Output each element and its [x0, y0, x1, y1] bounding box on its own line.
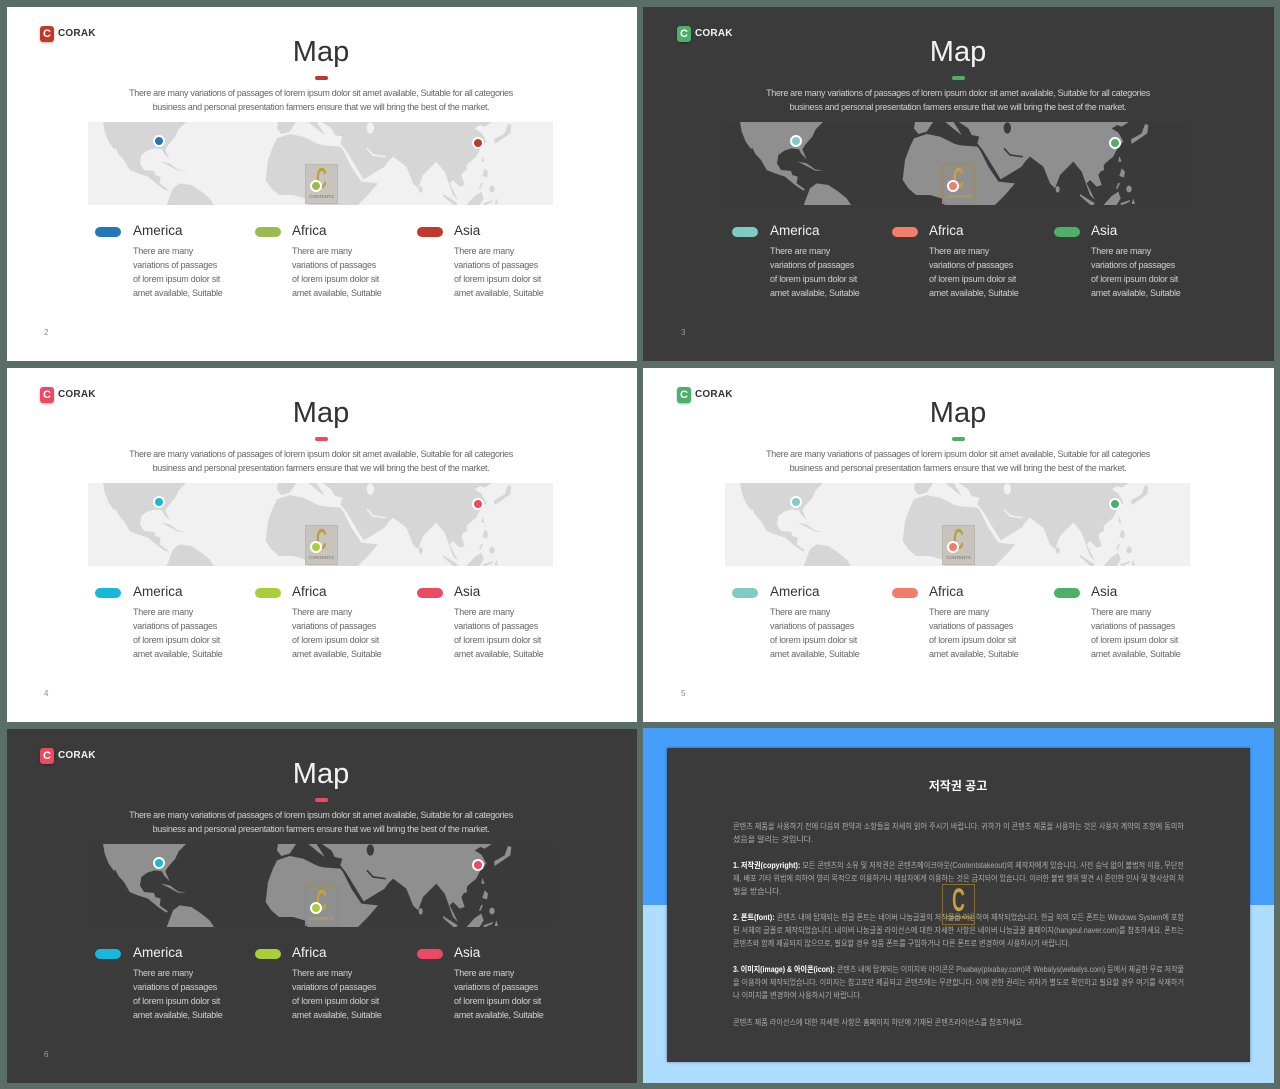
legend heading: Africa: Africa [292, 223, 327, 238]
legend heading: America: America [770, 584, 820, 599]
legend text: America: amet available, Suitable [770, 649, 860, 659]
logo icon [677, 26, 691, 42]
intro text: There are many variations of passages of lorem ipsum dolor sit amet available, Suitable for all categories [129, 449, 513, 459]
legend text: America: of lorem ipsum dolor sit [133, 996, 220, 1006]
notice text: 1. 저작권(copyright): 모든 콘텐츠의 소유 및 저작권은 콘텐츠메이크아웃(Contentstakeout)의 제작자에게 있습니다. 사전 승낙 없이 불법적 이용, 무단전 [733, 860, 1184, 870]
legend text: America: amet available, Suitable [770, 288, 860, 298]
legend pill: America [732, 588, 758, 598]
legend text: Africa: There are many [292, 246, 352, 256]
legend heading: America: America [770, 223, 820, 238]
legend text: Asia: variations of passages [454, 982, 538, 992]
watermark: CONTENTS [946, 915, 971, 920]
legend text: Africa: amet available, Suitable [929, 649, 1019, 659]
legend text: Africa: variations of passages [292, 982, 376, 992]
legend text: Africa: of lorem ipsum dolor sit [292, 996, 379, 1006]
pin: Asia [1109, 137, 1121, 149]
legend text: Africa [929, 607, 1019, 659]
legend text: America [133, 607, 223, 659]
legend text: Asia: There are many [454, 968, 514, 978]
title accent [315, 437, 328, 441]
notice text: 3. 이미지(image) & 아이콘(icon): 콘텐츠 내에 탑재되는 이미지와 아이콘은 Pixabay(pixabay.com)와 Webalys(webalys.com) 등에서 제공한 무료 저작물 [733, 964, 1184, 974]
legend text: America [770, 607, 860, 659]
watermark [305, 164, 338, 204]
notice text: 된 서체의 글꼴로 제작되었습니다. 네이버 나눔글꼴 라이선스에 대한 자세한 사항은 네이버 나눔글꼴 홈페이지(hangeul.naver.com)를 참조하세요. 폰트는 [733, 925, 1184, 935]
slide: dark map with teal, coral, green [643, 7, 1274, 361]
legend pill: Asia [1054, 227, 1080, 237]
intro text [766, 88, 1150, 112]
watermark [942, 164, 975, 204]
pin: Africa [310, 180, 322, 192]
pin: Africa [947, 541, 959, 553]
legend text: Asia: There are many [454, 607, 514, 617]
logo icon: C [43, 750, 51, 762]
intro text [129, 449, 513, 473]
intro text: There are many variations of passages of lorem ipsum dolor sit amet available, Suitable for all categories [766, 88, 1150, 98]
legend text: Asia: amet available, Suitable [1091, 288, 1181, 298]
legend text: Asia: There are many [1091, 607, 1151, 617]
intro text: There are many variations of passages of lorem ipsum dolor sit amet available, Suitable for all categories [766, 449, 1150, 459]
legend text: Africa: amet available, Suitable [292, 649, 382, 659]
legend text: Africa: There are many [292, 607, 352, 617]
slide: copyright notice [643, 728, 1274, 1083]
legend text: America: There are many [770, 607, 830, 617]
legend text: Asia: variations of passages [454, 621, 538, 631]
legend heading: Africa: Africa [292, 945, 327, 960]
legend text: Asia [1091, 607, 1181, 659]
pin: Asia [472, 498, 484, 510]
legend text: Asia: variations of passages [1091, 260, 1175, 270]
legend text: America [133, 968, 223, 1020]
legend text: Asia: of lorem ipsum dolor sit [454, 635, 541, 645]
pin: America [153, 496, 165, 508]
watermark: CONTENTS [309, 916, 334, 921]
world map [725, 483, 1190, 566]
slide: white map with teal, coral, green [643, 368, 1274, 722]
legend text: America: There are many [133, 246, 193, 256]
legend pill: Africa [255, 949, 281, 959]
logo icon [40, 387, 54, 403]
slide: dark map with cyan, lime, pink [7, 729, 637, 1083]
notice text: 을 이용하여 제작되었습니다. 이미지는 참고로만 제공되고 콘텐츠에는 무관합니다. 이에 관한 권리는 귀하가 별도로 확인하고 필요할 경우 여기를 삭제하거 [733, 977, 1184, 987]
title accent [952, 76, 965, 80]
legend text: America: variations of passages [133, 260, 217, 270]
logo icon: C [680, 28, 688, 40]
notice text: 셨음을 알리는 것입니다. [733, 834, 813, 844]
legend text: Asia: amet available, Suitable [1091, 649, 1181, 659]
intro text: business and personal presentation farmers ensure that we will bring the best of the market. [790, 102, 1126, 112]
title accent [315, 76, 328, 80]
logo wordmark: CORAK [695, 28, 733, 39]
notice text: 나 이미지를 변경하여 사용하시기 바랍니다. [733, 990, 862, 1000]
logo wordmark: CORAK [58, 389, 96, 400]
title: Map [293, 36, 349, 68]
legend heading: Asia: Asia [454, 584, 480, 599]
legend text: Asia: of lorem ipsum dolor sit [1091, 635, 1178, 645]
legend text: Asia: variations of passages [454, 260, 538, 270]
pin: Africa [310, 902, 322, 914]
legend pill: America [95, 588, 121, 598]
world map [103, 844, 512, 927]
pin: America [790, 135, 802, 147]
legend text: America: of lorem ipsum dolor sit [770, 635, 857, 645]
intro text: business and personal presentation farmers ensure that we will bring the best of the market. [153, 824, 489, 834]
page number: 2 [44, 328, 48, 337]
intro text [766, 449, 1150, 473]
legend text: Africa: amet available, Suitable [292, 288, 382, 298]
logo wordmark: CORAK [695, 389, 733, 400]
legend text: Africa: of lorem ipsum dolor sit [929, 635, 1016, 645]
legend heading: America: America [133, 945, 183, 960]
watermark [942, 525, 975, 565]
legend text: Africa [292, 968, 382, 1020]
legend text: America: variations of passages [133, 982, 217, 992]
legend text: Africa [292, 607, 382, 659]
legend heading: Africa: Africa [292, 584, 327, 599]
legend text: Asia [454, 968, 544, 1020]
legend heading: America: America [133, 584, 183, 599]
page number: 4 [44, 689, 48, 698]
notice text [733, 778, 1185, 1027]
legend heading: Asia: Asia [454, 945, 480, 960]
title: Map [930, 36, 986, 68]
title: Map [930, 397, 986, 429]
legend text: Asia: There are many [454, 246, 514, 256]
watermark [305, 525, 338, 565]
logo icon [40, 26, 54, 42]
notice text: 저작권 공고 [929, 778, 987, 793]
legend text: Asia: of lorem ipsum dolor sit [454, 274, 541, 284]
legend text: America: amet available, Suitable [133, 1010, 223, 1020]
legend text: Asia: amet available, Suitable [454, 1010, 544, 1020]
legend text: America: There are many [770, 246, 830, 256]
page number: 5 [681, 689, 685, 698]
legend pill: Asia [1054, 588, 1080, 598]
watermark: CONTENTS [309, 555, 334, 560]
page number: 6 [44, 1050, 48, 1059]
legend text: America: variations of passages [133, 621, 217, 631]
legend text: Africa: amet available, Suitable [929, 288, 1019, 298]
intro text: business and personal presentation farmers ensure that we will bring the best of the market. [153, 463, 489, 473]
legend text: America [770, 246, 860, 298]
notice text: 콘텐츠와 함께 제공되지 않으므로, 필요할 경우 정품 폰트를 구입하거나 다른 폰트로 변경하여 사용하시기 바랍니다. [733, 938, 1070, 948]
notice panel [667, 748, 1250, 1062]
logo icon: C [43, 389, 51, 401]
legend text: America: There are many [133, 968, 193, 978]
legend text: America: amet available, Suitable [133, 288, 223, 298]
notice text: 벌을 받습니다. [733, 886, 782, 896]
pin: America [153, 135, 165, 147]
legend text: Africa: There are many [929, 607, 989, 617]
watermark: CONTENTS [946, 194, 971, 199]
legend text: Africa [929, 246, 1019, 298]
legend pill: Asia [417, 588, 443, 598]
legend text: Asia [454, 607, 544, 659]
legend text: Africa: variations of passages [929, 621, 1013, 631]
legend text: Africa: variations of passages [292, 621, 376, 631]
legend pill: Africa [892, 227, 918, 237]
legend text: America: of lorem ipsum dolor sit [133, 274, 220, 284]
pin: America [790, 496, 802, 508]
watermark [942, 884, 975, 925]
legend heading: Africa: Africa [929, 223, 964, 238]
legend text: America [133, 246, 223, 298]
legend text: Africa: variations of passages [929, 260, 1013, 270]
notice text: 콘텐츠 제품 라이선스에 대한 자세한 사항은 홈페이지 하단에 기재된 콘텐츠라이선스를 참조하세요. [733, 1017, 1024, 1027]
legend pill: America [95, 227, 121, 237]
legend heading: Asia: Asia [454, 223, 480, 238]
intro text: business and personal presentation farmers ensure that we will bring the best of the market. [790, 463, 1126, 473]
world map [88, 122, 553, 205]
pin: Asia [472, 859, 484, 871]
legend pill: America [95, 949, 121, 959]
pin: Africa [947, 180, 959, 192]
legend text: Africa: variations of passages [292, 260, 376, 270]
legend text: Africa: of lorem ipsum dolor sit [929, 274, 1016, 284]
legend text: Asia: of lorem ipsum dolor sit [454, 996, 541, 1006]
logo icon: C [43, 28, 51, 40]
legend pill: Asia [417, 227, 443, 237]
legend text: Asia [454, 246, 544, 298]
slide: white map with blue, green, red [7, 7, 637, 361]
legend text: America: variations of passages [770, 621, 854, 631]
watermark [305, 886, 338, 926]
legend text: Asia: amet available, Suitable [454, 649, 544, 659]
legend text: Africa: There are many [292, 968, 352, 978]
legend text: America: amet available, Suitable [133, 649, 223, 659]
legend text: Africa: of lorem ipsum dolor sit [292, 274, 379, 284]
logo icon [40, 748, 54, 764]
legend text: Asia: of lorem ipsum dolor sit [1091, 274, 1178, 284]
watermark: CONTENTS [309, 194, 334, 199]
logo icon [677, 387, 691, 403]
legend heading: Africa: Africa [929, 584, 964, 599]
slide: white map with cyan, lime, pink [7, 368, 637, 722]
world map [88, 483, 553, 566]
legend pill: Africa [255, 588, 281, 598]
title: Map [293, 397, 349, 429]
pin: Asia [1109, 498, 1121, 510]
legend text: America: There are many [133, 607, 193, 617]
legend text: Africa: of lorem ipsum dolor sit [292, 635, 379, 645]
intro text [129, 88, 513, 112]
legend text: Africa: amet available, Suitable [292, 1010, 382, 1020]
legend text: America: of lorem ipsum dolor sit [133, 635, 220, 645]
legend text: Asia: variations of passages [1091, 621, 1175, 631]
pin: Africa [310, 541, 322, 553]
pin: Asia [472, 137, 484, 149]
legend heading: America: America [133, 223, 183, 238]
intro text: There are many variations of passages of lorem ipsum dolor sit amet available, Suitable for all categories [129, 88, 513, 98]
legend text: Africa [292, 246, 382, 298]
legend heading: Asia: Asia [1091, 223, 1117, 238]
legend text: Asia: There are many [1091, 246, 1151, 256]
legend text: Asia [1091, 246, 1181, 298]
legend heading: Asia: Asia [1091, 584, 1117, 599]
legend text: Africa: There are many [929, 246, 989, 256]
legend pill: Africa [892, 588, 918, 598]
title: Map [293, 758, 349, 790]
notice text: 2. 폰트(font): 콘텐츠 내에 탑재되는 한글 폰트는 네이버 나눔글꼴의 저작물을 이용하여 제작되었습니다. 한글 외의 모든 폰트는 Windows System에 포함 [733, 912, 1185, 922]
legend pill: Africa [255, 227, 281, 237]
notice text: 재, 배포 기타 위법에 의하여 영리 목적으로 이용하거나 제삼자에게 이용하는 것은 금지되어 있습니다. 이러한 불법 행위 발견 시 준민한 민사 및 형사상의 처 [733, 873, 1184, 883]
legend text: America: of lorem ipsum dolor sit [770, 274, 857, 284]
legend text: America: variations of passages [770, 260, 854, 270]
title accent [315, 798, 328, 802]
intro text [129, 810, 513, 834]
logo wordmark: CORAK [58, 750, 96, 761]
watermark: CONTENTS [946, 555, 971, 560]
intro text: business and personal presentation farmers ensure that we will bring the best of the market. [153, 102, 489, 112]
notice text: 콘텐츠 제품을 사용하기 전에 다음의 판약과 소항들을 자세히 읽어 주시기 바랍니다. 귀하가 이 콘텐츠 제품을 사용하는 것은 사용자 계약의 조항에 동의하 [733, 821, 1185, 831]
pin: America [153, 857, 165, 869]
legend pill: America [732, 227, 758, 237]
logo wordmark: CORAK [58, 28, 96, 39]
world map [740, 122, 1148, 205]
page number: 3 [681, 328, 685, 337]
legend text: Asia: amet available, Suitable [454, 288, 544, 298]
logo icon: C [680, 389, 688, 401]
intro text: There are many variations of passages of lorem ipsum dolor sit amet available, Suitable for all categories [129, 810, 513, 820]
legend pill: Asia [417, 949, 443, 959]
title accent [952, 437, 965, 441]
